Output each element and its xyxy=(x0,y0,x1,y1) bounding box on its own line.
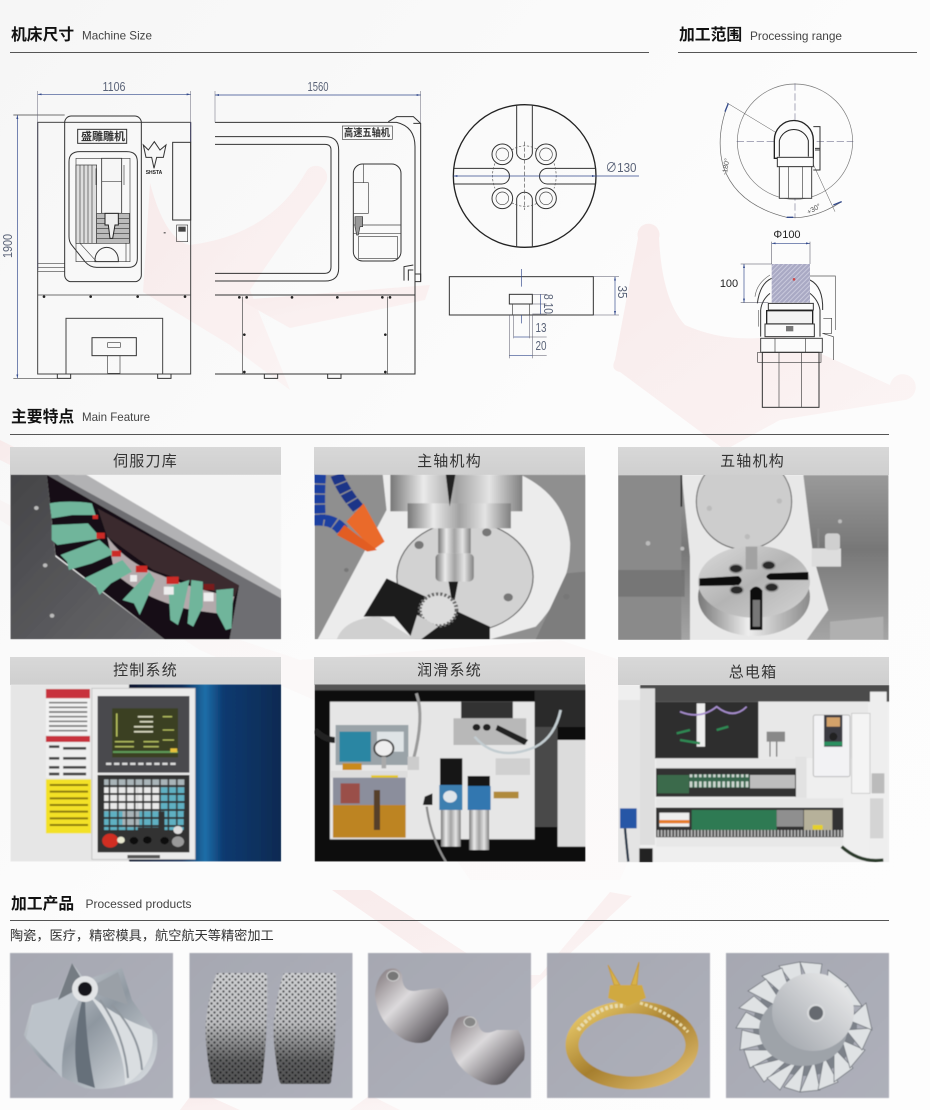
drawing: machine front view xyxy=(0,79,191,378)
panel heading: 总电箱 xyxy=(729,664,777,681)
drawing: processing range workpiece view: 100 xyxy=(720,278,738,290)
product: knurled blocks xyxy=(190,953,352,1098)
section heading: processed products xyxy=(10,895,889,921)
section heading: machine size: Machine Size xyxy=(82,28,152,42)
drawing: processing range rotation view: +30° xyxy=(806,202,823,216)
panel: lubrication system xyxy=(314,657,586,862)
section heading: main feature: Main Feature xyxy=(82,410,150,424)
product: compressor impeller xyxy=(10,953,173,1098)
photo: electrical cabinet xyxy=(618,685,889,862)
panel: five-axis mechanism xyxy=(618,447,889,640)
panel: servo tool magazine xyxy=(10,447,281,639)
drawing: machine side view xyxy=(215,79,421,378)
section heading: processing range: Processing range xyxy=(750,29,842,43)
section heading: processed products: Processed products xyxy=(86,897,192,911)
panel heading xyxy=(314,447,585,475)
panel: spindle mechanism xyxy=(314,447,586,639)
panel heading: 控制系统 xyxy=(113,662,178,679)
panel heading: 五轴机构 xyxy=(720,453,785,470)
product: gold ring xyxy=(547,953,710,1098)
drawing: machine front view: SHSTA xyxy=(146,170,163,176)
text: processing applications: 陶瓷，医疗，精密模具，航空航天等精密加工 xyxy=(10,927,274,943)
panel heading: 润滑系统 xyxy=(417,662,482,679)
section heading: processing range xyxy=(678,26,917,53)
product: dental implants xyxy=(368,953,531,1098)
drawing: chuck section view: 8 10 xyxy=(541,294,556,314)
panel heading xyxy=(618,657,889,685)
drawing: machine side view: 1560 xyxy=(308,79,328,94)
panel heading: 伺服刀库 xyxy=(113,453,178,470)
drawing: machine front view: 1106 xyxy=(102,79,126,94)
panel heading: 主轴机构 xyxy=(417,453,482,470)
panel heading xyxy=(314,657,585,685)
drawing: chuck top view xyxy=(453,105,639,247)
drawing: processing range rotation view xyxy=(720,83,853,218)
drawing: processing range workpiece view: Φ100 xyxy=(773,229,801,241)
section heading: machine size xyxy=(10,25,649,53)
photo: lubrication unit xyxy=(315,684,586,862)
drawing: chuck top view: ∅130 xyxy=(606,160,636,175)
drawing: machine front view: 盛雕雕机 xyxy=(81,129,125,143)
panel heading xyxy=(618,447,889,475)
photo: spindle xyxy=(315,475,586,639)
drawing: processing range workpiece view xyxy=(720,229,835,407)
drawing: chuck section view: 35 xyxy=(615,286,630,298)
product: turbine wheel xyxy=(726,953,889,1098)
photo: five-axis chuck xyxy=(618,475,889,640)
section heading: main feature xyxy=(10,407,889,435)
photo: tool magazine xyxy=(10,475,281,639)
drawing: machine side view: 高速五轴机 xyxy=(344,126,390,139)
section heading: processing range: 加工范围 xyxy=(679,26,742,44)
photo: CNC control panel xyxy=(10,684,281,862)
drawing: chuck section view xyxy=(449,269,630,358)
panel heading xyxy=(10,657,281,685)
drawing: machine front view: 1900 xyxy=(0,234,15,258)
drawing: processing range rotation view: -180° xyxy=(721,157,731,176)
panel heading xyxy=(10,447,281,475)
section heading: processed products: 加工产品 xyxy=(11,895,74,913)
section heading: machine size: 机床尺寸 xyxy=(11,25,74,44)
drawing: chuck section view: 13 xyxy=(536,320,546,335)
panel: control system xyxy=(10,657,281,862)
section heading: main feature: 主要特点 xyxy=(11,407,74,426)
panel: electrical cabinet xyxy=(618,657,889,862)
drawing: chuck section view: 20 xyxy=(536,338,546,353)
